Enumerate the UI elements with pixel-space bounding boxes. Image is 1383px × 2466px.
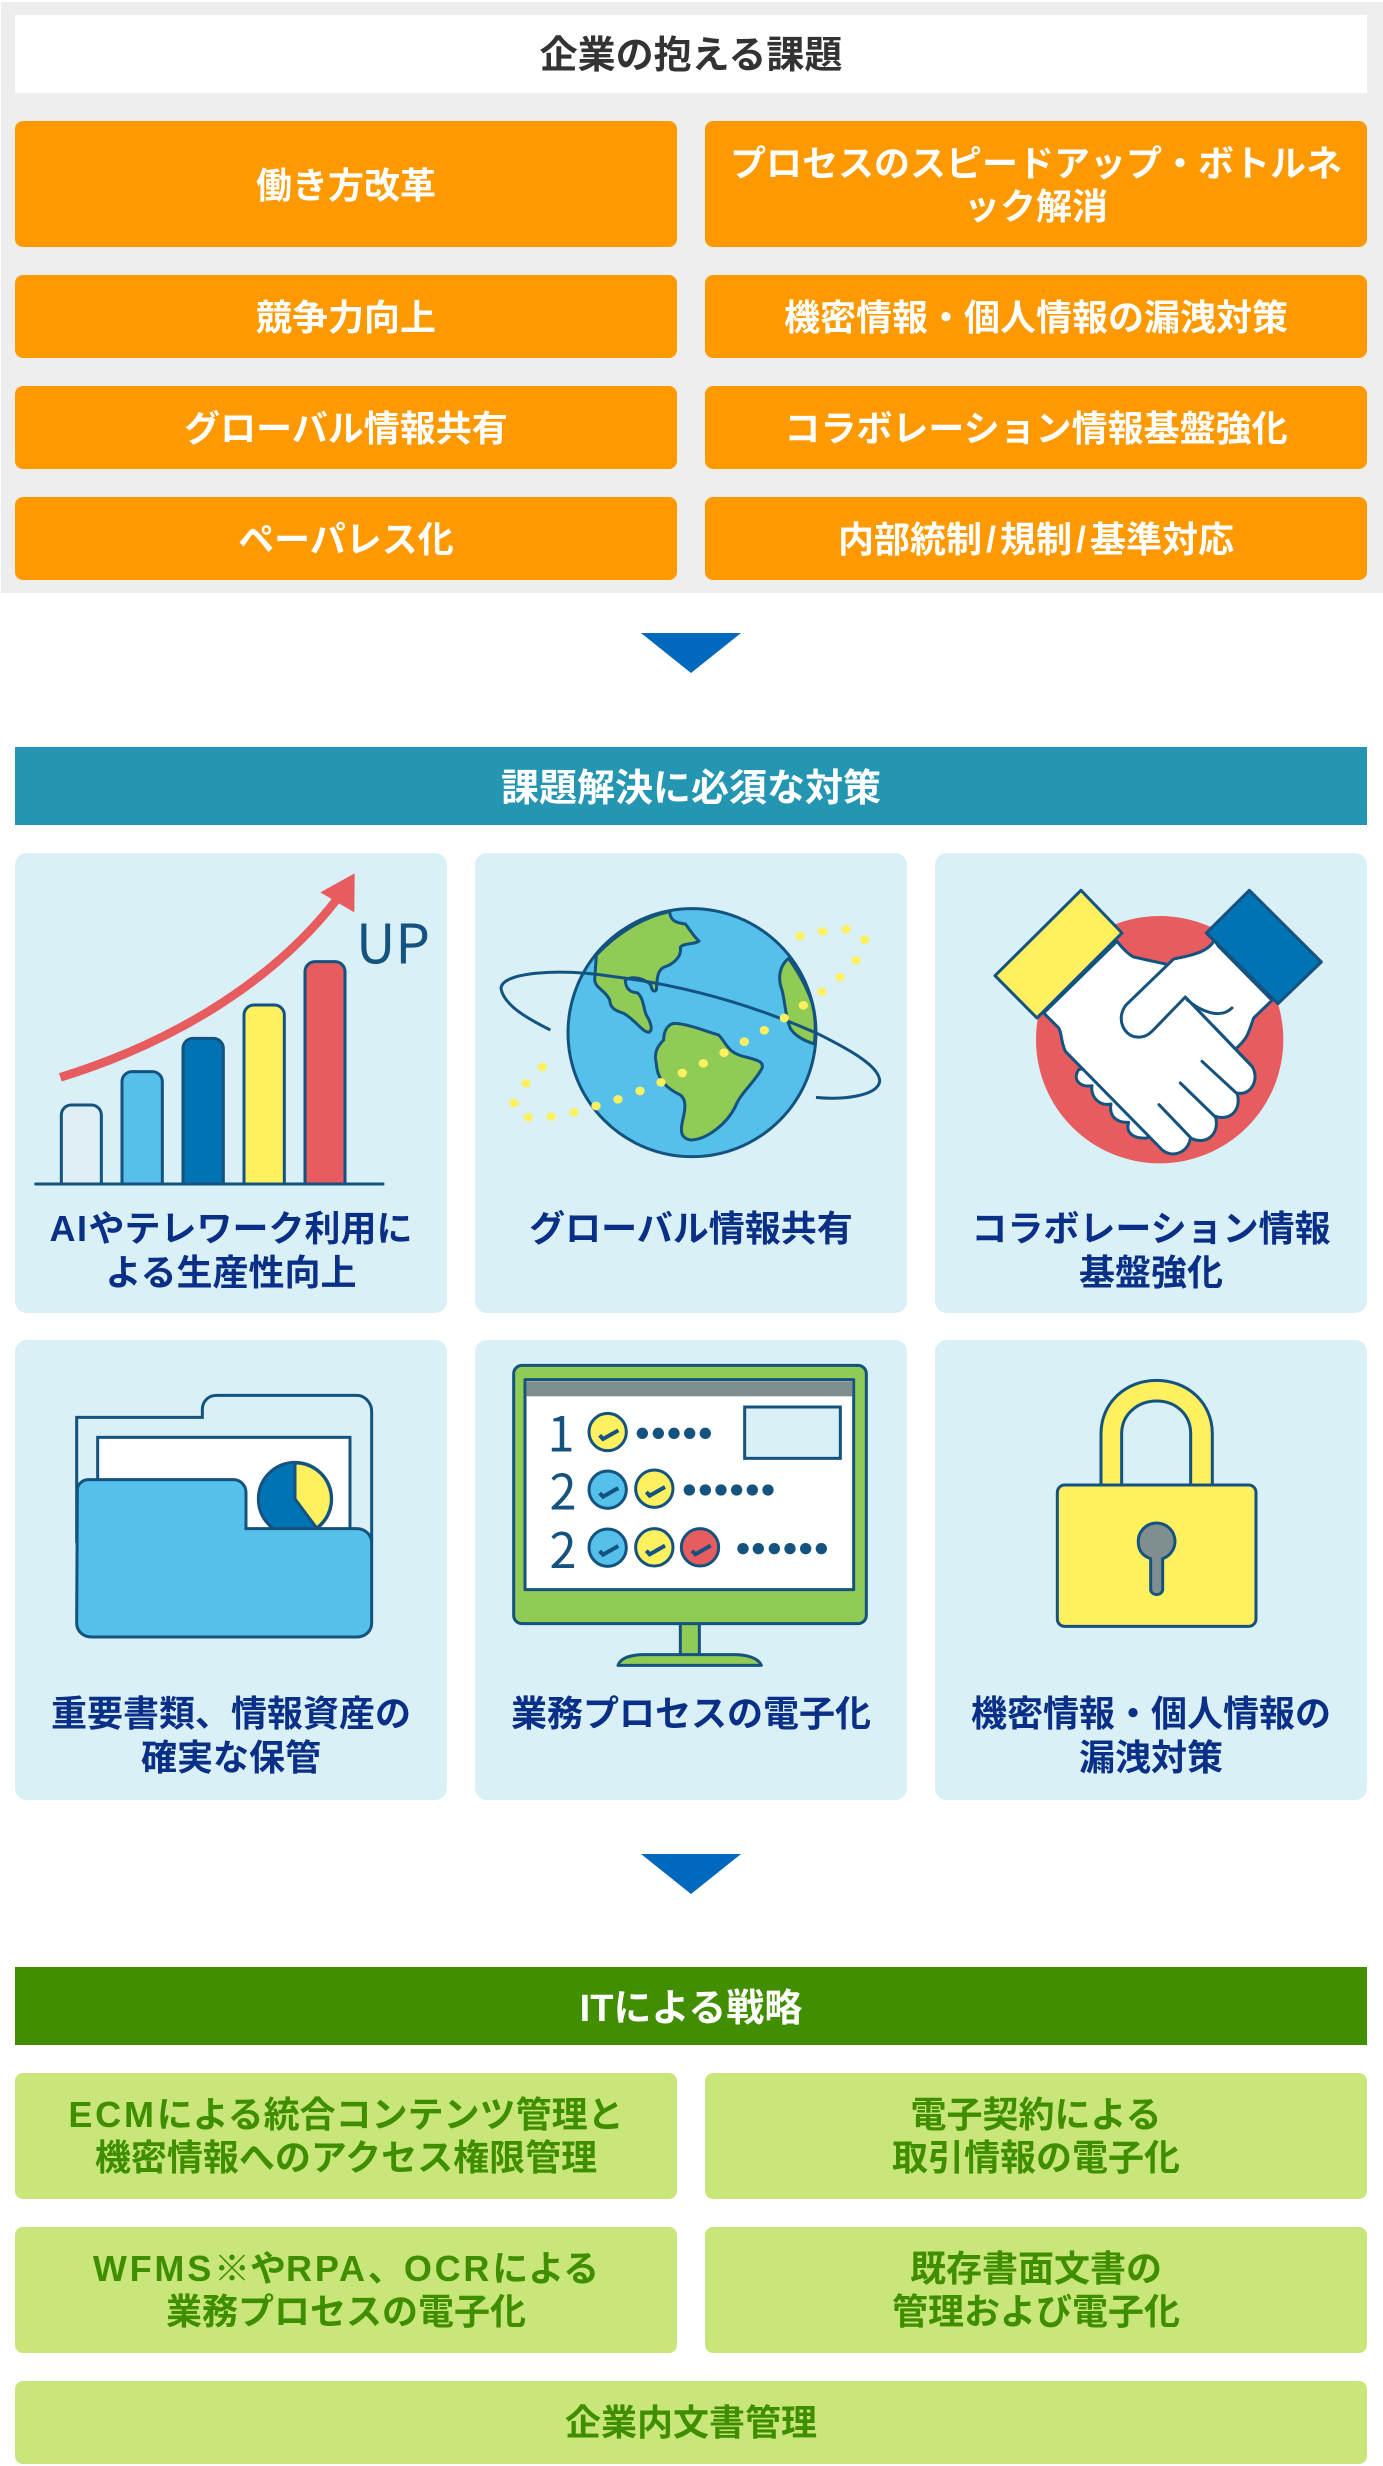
strategy: electronic contracts: 電子契約による xyxy=(911,2094,1161,2135)
arrow: down to IT strategy xyxy=(641,1854,741,1894)
strategy: existing paper documents: 管理および電子化 xyxy=(892,2291,1180,2332)
caption: leak prevention xyxy=(971,1693,1331,1778)
strategy: enterprise document management: 企業内文書管理 xyxy=(565,2402,817,2443)
strategy: electronic contracts xyxy=(705,2073,1367,2199)
caption: document storage: 重要書類、情報資産の xyxy=(51,1693,411,1734)
strategy: WFMS, RPA, OCR xyxy=(15,2227,677,2353)
card: document storage xyxy=(15,1340,447,1800)
caption: productivity: よる生産性向上 xyxy=(106,1252,356,1293)
icon: monitor with checklist: 2 xyxy=(549,1455,576,1525)
panel: corporate challenges xyxy=(1,2,1383,593)
strategy: existing paper documents: 既存書面文書の xyxy=(910,2248,1162,2289)
icon: padlock xyxy=(1056,1378,1258,1628)
caption: document storage xyxy=(51,1693,411,1778)
panel: essential measures xyxy=(15,747,1367,1800)
caption: productivity: AIやテレワーク利用に xyxy=(49,1208,412,1249)
challenge: collaboration platform xyxy=(705,386,1367,469)
heading: corporate challenges xyxy=(15,15,1367,93)
caption: global sharing: グローバル情報共有 xyxy=(529,1208,853,1249)
card: collaboration xyxy=(935,853,1367,1313)
caption: collaboration: コラボレーション情報 xyxy=(971,1208,1331,1249)
challenge: collaboration platform: コラボレーション情報基盤強化 xyxy=(784,408,1288,449)
challenge: process speed-up xyxy=(705,121,1367,247)
card: leak prevention xyxy=(935,1340,1367,1800)
challenge: information leak prevention: 機密情報・個人情報の漏洩対策 xyxy=(784,297,1288,338)
challenge: competitiveness: 競争力向上 xyxy=(256,297,436,338)
caption: leak prevention: 機密情報・個人情報の xyxy=(971,1693,1331,1734)
heading: IT strategy xyxy=(15,1967,1367,2045)
icon: handshake xyxy=(993,888,1323,1164)
card: global sharing xyxy=(475,853,907,1313)
arrow: down to measures xyxy=(641,633,741,673)
icon: rising bar chart: UP xyxy=(356,900,430,979)
icon: folder with pie chart document xyxy=(75,1394,374,1638)
heading: essential measures: 課題解決に必須な対策 xyxy=(501,768,881,810)
icon: rising bar chart xyxy=(34,873,430,1186)
caption: productivity xyxy=(49,1208,412,1293)
challenge: global information sharing xyxy=(15,386,677,469)
caption: business process digitisation: 業務プロセスの電子化 xyxy=(511,1693,871,1734)
challenge: global information sharing: グローバル情報共有 xyxy=(184,408,508,449)
challenge: paperless: ペーパレス化 xyxy=(238,519,454,560)
heading: corporate challenges: 企業の抱える課題 xyxy=(540,34,842,76)
strategy: ECM: 機密情報へのアクセス権限管理 xyxy=(95,2137,597,2178)
strategy: WFMS, RPA, OCR: WFMS※やRPA、OCRによる xyxy=(93,2248,599,2289)
challenge: work style reform: 働き方改革 xyxy=(256,164,436,206)
caption: collaboration xyxy=(971,1208,1331,1293)
icon: globe with orbit xyxy=(500,907,882,1158)
strategy: ECM: ECMによる統合コンテンツ管理と xyxy=(68,2094,624,2135)
heading: IT strategy: ITによる戦略 xyxy=(580,1988,802,2030)
challenge: paperless xyxy=(15,497,677,580)
caption: leak prevention: 漏洩対策 xyxy=(1079,1737,1223,1778)
strategy: enterprise document management xyxy=(15,2381,1367,2464)
icon: monitor with checklist xyxy=(512,1364,868,1667)
card: business process digitisation xyxy=(475,1340,907,1800)
icon: monitor with checklist: 1 xyxy=(547,1397,574,1467)
icon: monitor with checklist: 2 xyxy=(549,1513,576,1583)
challenge: process speed-up: プロセスのスピードアップ・ボトルネ xyxy=(730,143,1342,184)
strategy: electronic contracts: 取引情報の電子化 xyxy=(892,2137,1180,2178)
strategy: WFMS, RPA, OCR: 業務プロセスの電子化 xyxy=(166,2291,526,2332)
challenge: process speed-up: ック解消 xyxy=(964,186,1108,227)
challenge: competitiveness xyxy=(15,275,677,358)
heading: essential measures xyxy=(15,747,1367,825)
caption: document storage: 確実な保管 xyxy=(141,1737,321,1778)
challenge: internal control and regulation: 内部統制/規制/基準対応 xyxy=(838,519,1234,560)
challenge: work style reform xyxy=(15,121,677,247)
card: productivity xyxy=(15,853,447,1313)
strategy: existing paper documents xyxy=(705,2227,1367,2353)
caption: collaboration: 基盤強化 xyxy=(1079,1252,1223,1293)
challenge: internal control and regulation xyxy=(705,497,1367,580)
challenge: information leak prevention xyxy=(705,275,1367,358)
strategy: ECM xyxy=(15,2073,677,2199)
panel: IT strategy xyxy=(15,1967,1367,2464)
